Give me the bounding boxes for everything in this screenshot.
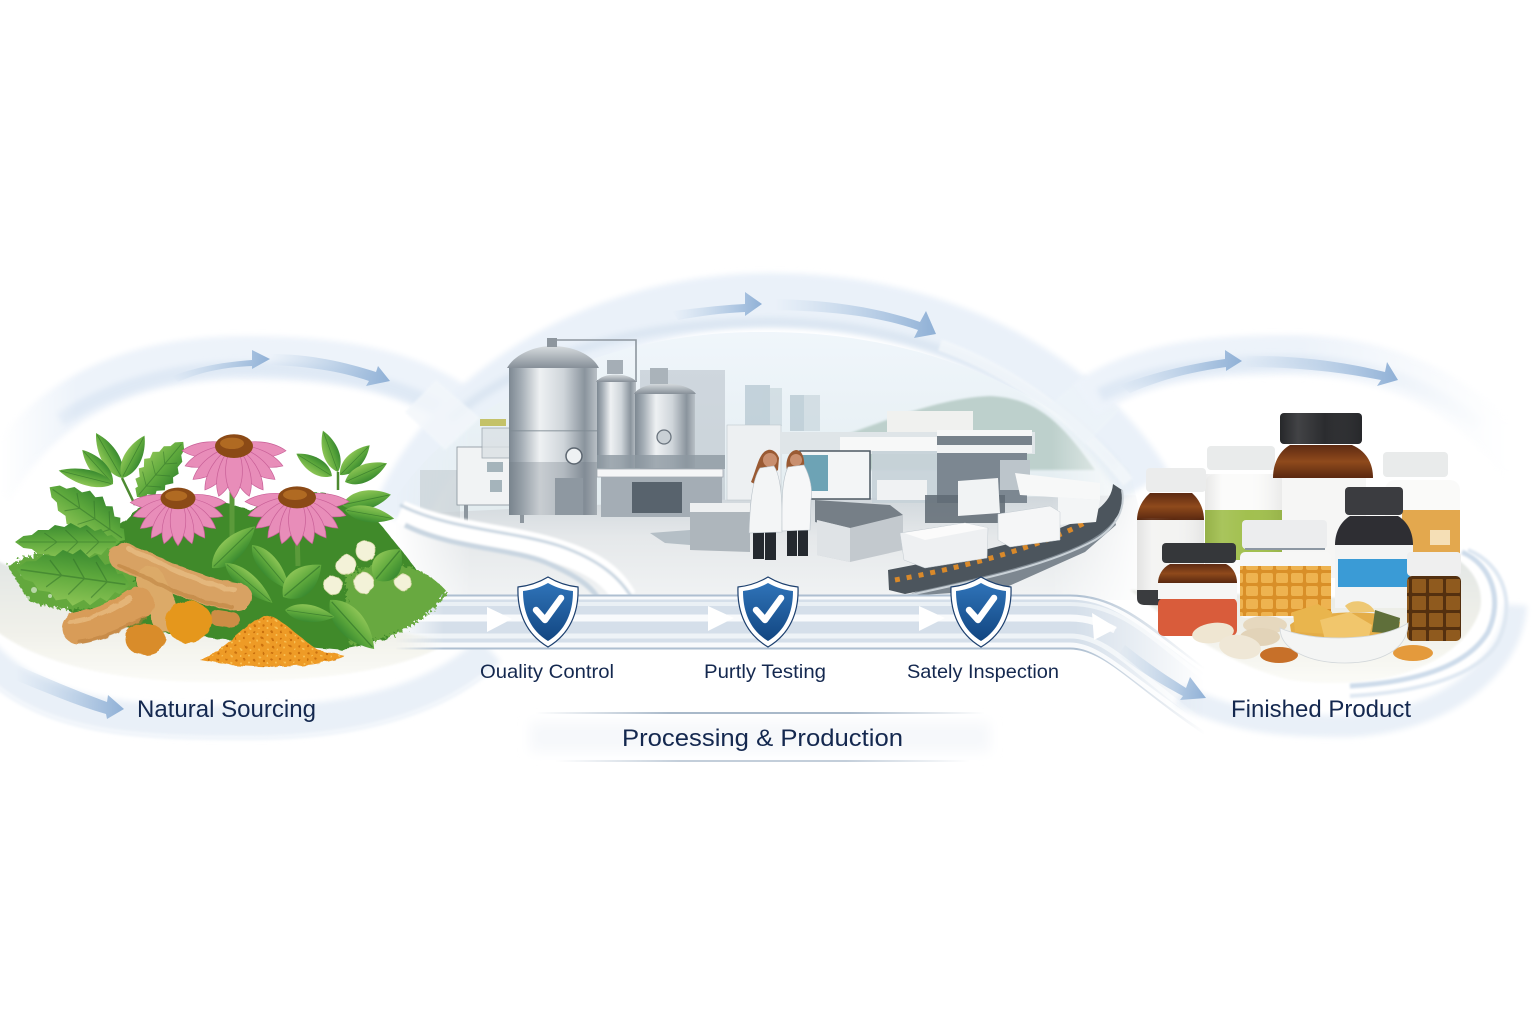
tablets (1191, 616, 1433, 663)
turmeric roots (70, 550, 238, 642)
left cabinets (420, 419, 532, 523)
foliage mass (68, 493, 430, 650)
white buildings (727, 411, 1035, 503)
arc crossing right (1050, 375, 1120, 445)
bushy right foliage (345, 564, 447, 645)
flower: top (182, 434, 286, 499)
bottle: front red (1158, 543, 1237, 636)
front leaves (204, 518, 384, 658)
arrow: dome second (775, 299, 936, 338)
white blossoms (324, 541, 411, 594)
flower: right (245, 486, 349, 546)
arrow: dome first (672, 292, 762, 320)
monitors and lab glass (800, 451, 1005, 523)
arrow: to finished product (1118, 645, 1206, 700)
bottle: left amber (1137, 468, 1206, 606)
arc crossing left (405, 380, 480, 450)
arrow: natural sourcing top second (270, 354, 390, 386)
bush speckles (20, 572, 52, 600)
dome backdrop (385, 330, 1160, 600)
distant towers (745, 385, 820, 431)
big tank (507, 338, 636, 515)
flower: left (130, 488, 226, 546)
panel: finished product ring (1085, 350, 1520, 726)
panel: herbs (8, 428, 447, 667)
bowl with food (1280, 601, 1408, 663)
floor (434, 496, 1112, 600)
herb stems (122, 472, 338, 505)
panel: processing and production heading (530, 712, 990, 762)
bushy left foliage (8, 546, 135, 610)
flower stems (232, 480, 298, 566)
white boxes (900, 473, 1100, 568)
icon: shield quality control (518, 577, 578, 647)
right tank (634, 368, 696, 468)
label: natural sourcing: Natural Sourcing (137, 696, 316, 723)
icon: shield purity testing (738, 577, 798, 647)
factory backdrop (640, 370, 725, 500)
turmeric powder (200, 615, 345, 667)
plate: herbs surface (0, 560, 452, 682)
label: purity testing: Purtly Testing (704, 661, 826, 683)
conveyor belt (888, 484, 1123, 596)
arrow: channel white four (1092, 613, 1117, 640)
bottle: back amber big (1273, 413, 1373, 578)
label: quality control: Ouality Control (480, 661, 614, 683)
icon: shield safety inspection (951, 577, 1011, 647)
medium tank (596, 360, 637, 468)
arrow: channel white two (708, 606, 734, 631)
heading: processing and production: Processing & Production (622, 725, 903, 752)
arc highlight over hills (940, 345, 1128, 482)
scientists (749, 450, 812, 560)
bottle: center capsules (1240, 520, 1331, 618)
floor sweeping bands (400, 505, 632, 598)
steel counters (650, 500, 903, 562)
panel: supplement bottles (1137, 413, 1461, 663)
hills (852, 395, 1094, 471)
panel: quality control channel (380, 604, 1240, 730)
arrow: finished product top first (1120, 350, 1242, 393)
sprig and broad leaves (12, 428, 412, 613)
platform under tanks (597, 455, 725, 517)
label: finished product: Finished Product (1231, 696, 1411, 723)
label: safety inspection: Sately Inspection (907, 661, 1059, 683)
arrow: channel white three (919, 606, 945, 631)
panel: processing dome (385, 292, 1160, 600)
arrow: finished product top second (1245, 356, 1398, 386)
arrow: channel white one (487, 607, 512, 632)
arrow: natural sourcing top first (172, 350, 270, 382)
turmeric cut pieces (125, 601, 212, 655)
infographic: supply chain flow (0, 272, 1527, 762)
panel: natural sourcing ring (0, 350, 490, 738)
bottle: back green (1205, 446, 1283, 574)
bottle: dark blue label (1335, 487, 1413, 608)
bottle: back orange (1383, 452, 1460, 570)
arrow: natural sourcing bottom (15, 664, 124, 719)
bottle: small amber (1407, 552, 1461, 641)
